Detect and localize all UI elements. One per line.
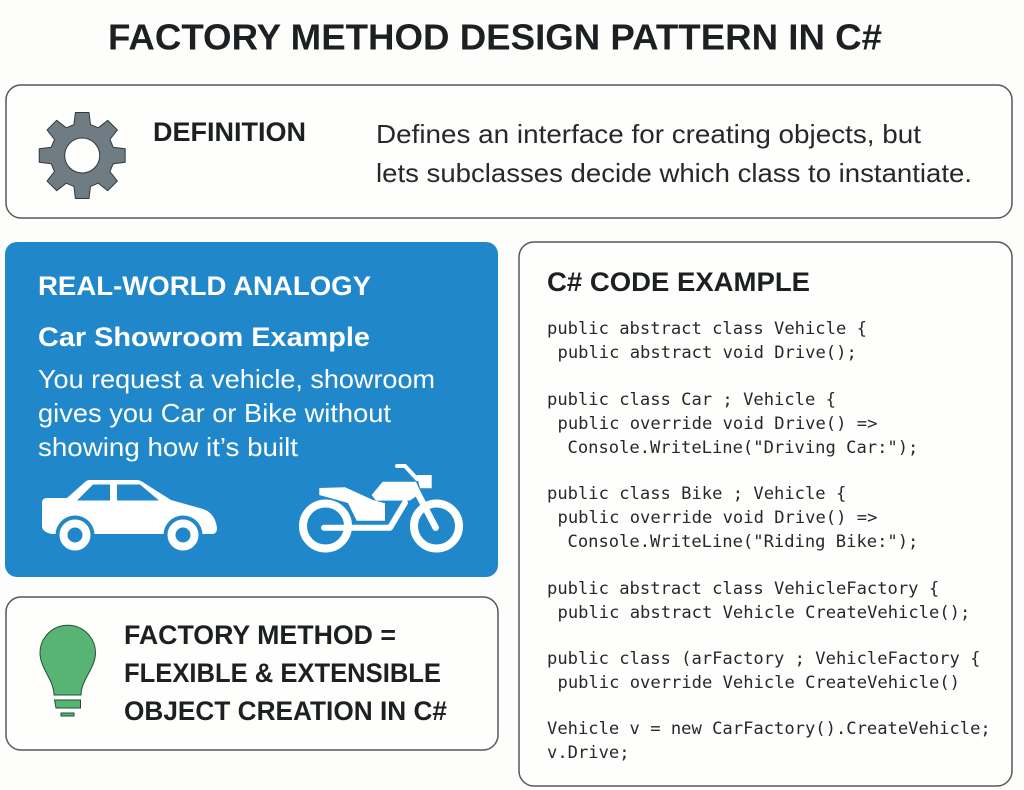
- analogy description: [38, 364, 435, 462]
- definition text: lets subclasses decide which class to instantiate.: [376, 158, 972, 188]
- icon: car: [42, 480, 217, 554]
- takeaway text: FACTORY METHOD =: [124, 620, 396, 650]
- code listing: v.Drive;: [547, 743, 630, 763]
- panel: definition: [6, 85, 1012, 218]
- code heading: C# CODE EXAMPLE: [547, 267, 810, 297]
- title: FACTORY METHOD DESIGN PATTERN IN C#: [108, 16, 882, 57]
- code listing: public override void Drive() =>: [558, 508, 877, 528]
- code listing: Console.WriteLine("Riding Bike:");: [568, 532, 918, 552]
- code listing: [547, 319, 991, 763]
- code listing: public class Car ; Vehicle {: [547, 390, 836, 410]
- panel: real-world analogy: [5, 242, 498, 577]
- code listing: Vehicle v = new CarFactory().CreateVehicle;: [547, 719, 991, 739]
- takeaway text: FLEXIBLE & EXTENSIBLE: [124, 658, 441, 688]
- takeaway text: OBJECT CREATION IN C#: [124, 696, 447, 726]
- analogy subheading: Car Showroom Example: [38, 322, 370, 352]
- definition heading: DEFINITION: [153, 117, 306, 147]
- icon: light bulb: [40, 625, 96, 716]
- takeaway text: [124, 620, 447, 726]
- definition text: [376, 119, 972, 188]
- panel: key takeaway: [6, 597, 498, 750]
- icon: gear: [39, 113, 125, 198]
- code listing: public override Vehicle CreateVehicle(): [558, 673, 960, 693]
- code listing: public class Bike ; Vehicle {: [547, 484, 846, 504]
- code listing: public abstract class VehicleFactory {: [547, 579, 939, 599]
- analogy description: gives you Car or Bike without: [38, 398, 392, 428]
- code listing: Console.WriteLine("Driving Car:");: [568, 438, 918, 458]
- panel: code example: [519, 242, 1012, 786]
- analogy description: You request a vehicle, showroom: [38, 364, 435, 394]
- code listing: public abstract class Vehicle {: [547, 319, 867, 339]
- code listing: public class (arFactory ; VehicleFactory {: [547, 649, 980, 669]
- analogy description: showing how it’s built: [38, 432, 299, 462]
- icon: motorcycle: [303, 466, 459, 548]
- code listing: public abstract Vehicle CreateVehicle();: [558, 603, 970, 623]
- definition text: Defines an interface for creating objects, but: [376, 119, 922, 149]
- code listing: public abstract void Drive();: [558, 343, 857, 363]
- code listing: public override void Drive() =>: [558, 414, 877, 434]
- analogy heading: REAL-WORLD ANALOGY: [38, 271, 371, 301]
